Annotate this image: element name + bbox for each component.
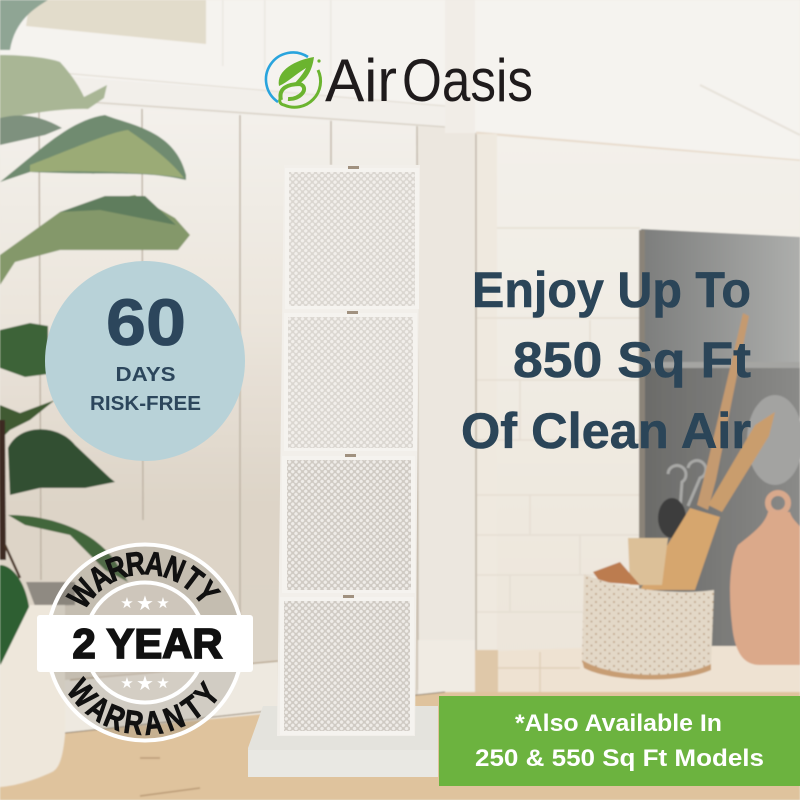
curved text top: T — [175, 560, 210, 599]
badge: 60 days risk-free — [45, 261, 245, 461]
air purifier tower — [248, 165, 438, 777]
filter panel 2 — [284, 311, 417, 451]
warranty seal — [37, 544, 253, 743]
stars bottom: ★ — [136, 671, 154, 695]
plant leaves — [0, 0, 190, 665]
stars top: ★ — [120, 594, 134, 612]
label days: DAYS — [116, 364, 176, 386]
fireplace opening — [639, 229, 800, 650]
curved text bottom: R — [99, 698, 130, 739]
curved text top: A — [143, 545, 166, 584]
window and trim — [0, 0, 445, 128]
curved text top: W — [61, 573, 106, 615]
curved text bottom: N — [159, 698, 190, 739]
logo: Air Oasis — [266, 47, 533, 114]
stars bottom — [120, 671, 170, 695]
curved text bottom: A — [80, 689, 117, 730]
outer and inner rings — [47, 544, 243, 740]
floor — [0, 692, 800, 800]
brick fireplace surround — [477, 134, 800, 660]
broom and vases — [582, 313, 800, 680]
stand base — [248, 706, 438, 777]
curved text bottom: A — [142, 704, 165, 743]
curved text top: R — [124, 545, 147, 584]
headline: enjoy up to 850 sq ft of clean air: 850 Sq Ft — [513, 332, 751, 388]
filter panel 4 — [280, 595, 414, 735]
callout: other models: *Also Available In — [515, 710, 722, 737]
callout: other models: 250 & 550 Sq Ft Models — [475, 745, 764, 772]
curved text top: R — [101, 549, 132, 590]
logo: Air Oasis: Oasis — [402, 47, 533, 114]
stars top — [120, 591, 170, 615]
curved text bottom: Y — [188, 676, 227, 713]
curved text bottom: R — [122, 704, 146, 743]
callout: other models — [439, 696, 800, 786]
curved text bottom — [60, 673, 227, 743]
plant pot — [0, 582, 75, 787]
mantel — [445, 0, 800, 161]
filter panel 1 — [285, 166, 419, 309]
curved text bottom: T — [176, 689, 210, 728]
filter panel 3 — [282, 454, 415, 593]
label risk-free: RISK-FREE — [90, 393, 201, 415]
headline: enjoy up to 850 sq ft of clean air — [461, 262, 751, 459]
stars top: ★ — [156, 594, 170, 612]
icon: leaf ring — [266, 52, 321, 107]
curved text top — [61, 545, 226, 615]
hearth — [470, 646, 800, 696]
stars top: ★ — [136, 591, 154, 615]
curved text top: A — [82, 558, 118, 599]
curved text bottom: W — [60, 673, 104, 715]
stars bottom: ★ — [120, 674, 134, 692]
stars bottom: ★ — [156, 674, 170, 692]
wall panels — [0, 100, 480, 740]
headline: enjoy up to 850 sq ft of clean air: Enjoy Up To — [472, 262, 751, 318]
number 60: 60 — [106, 285, 186, 359]
wordmark: Air — [325, 47, 397, 114]
baseboard — [65, 660, 278, 735]
curved text top: N — [159, 549, 190, 590]
curved text top: Y — [186, 575, 226, 611]
banner: 2 year — [37, 615, 253, 672]
banner: 2 year: 2 YEAR — [72, 620, 222, 667]
headline: enjoy up to 850 sq ft of clean air: Of Clean Air — [461, 403, 751, 459]
